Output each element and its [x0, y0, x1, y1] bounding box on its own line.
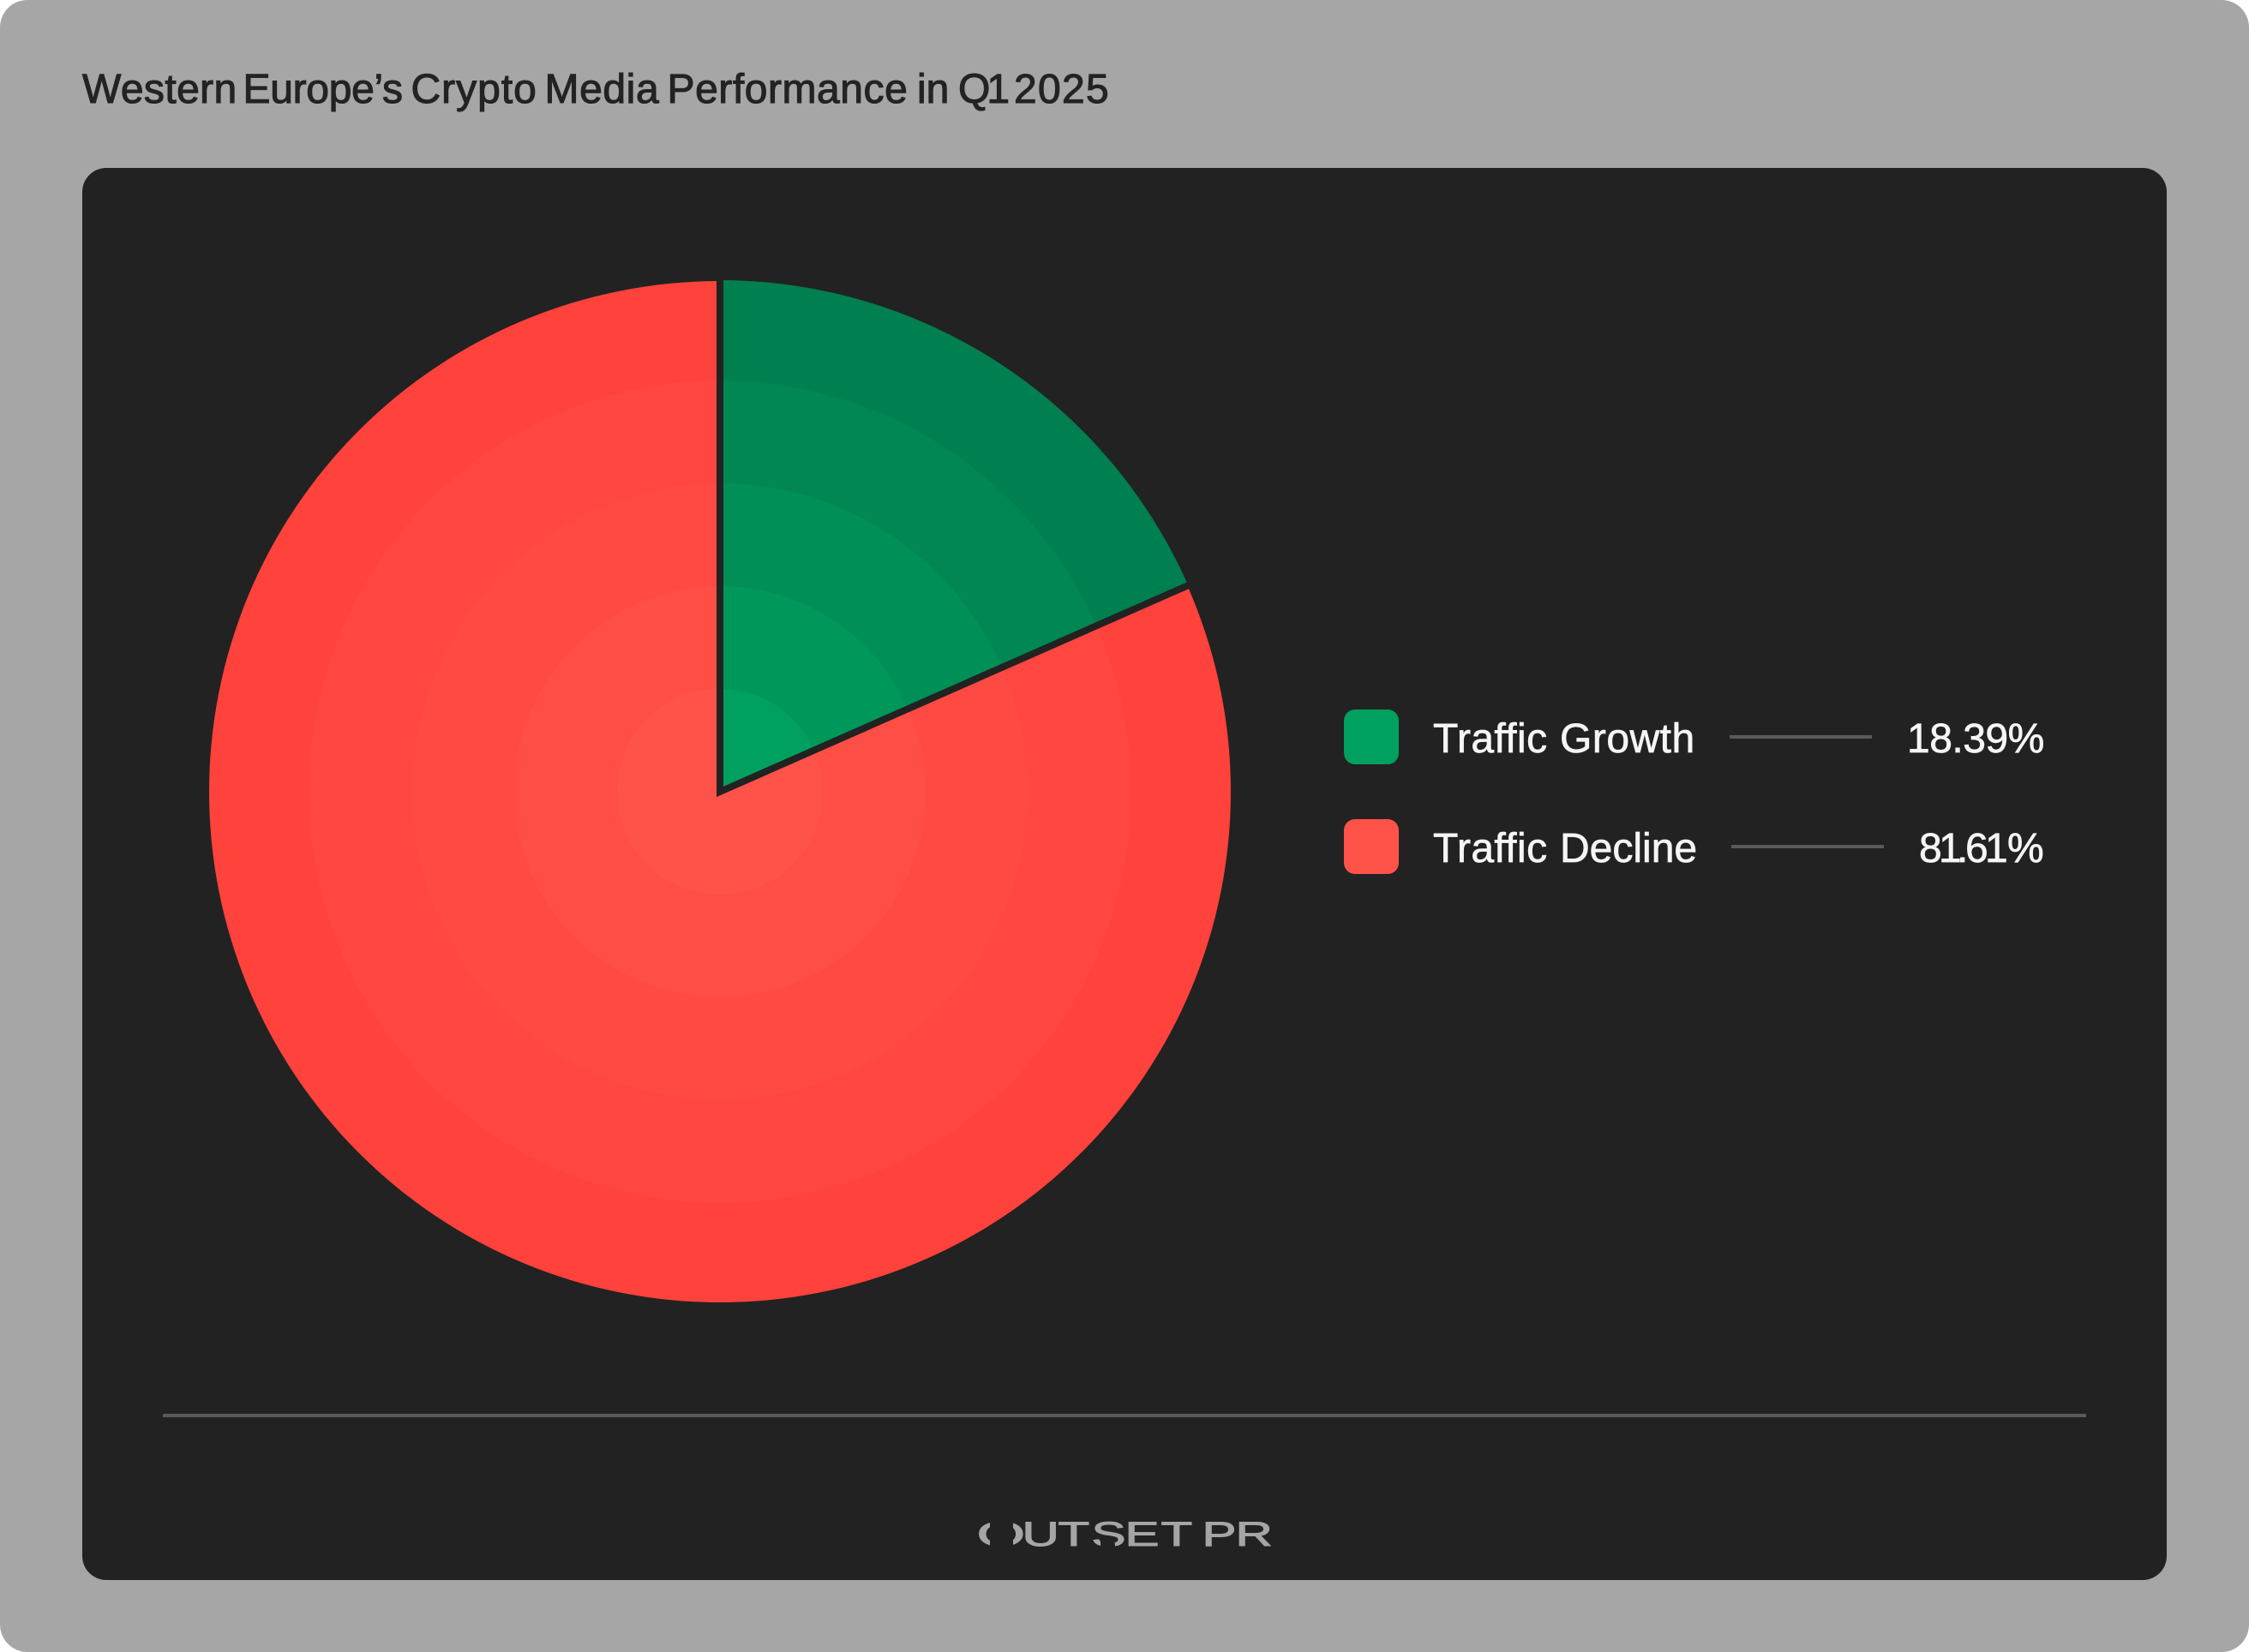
- legend row: traffic growth: [1344, 709, 2044, 764]
- pie chart: [208, 274, 1232, 1303]
- value: 18.39%: 18.39%: [1907, 716, 2044, 762]
- title: Crypto: [411, 67, 549, 112]
- swatch: green: [1344, 709, 1399, 764]
- leader line: [1730, 735, 1872, 739]
- slice separator: [720, 274, 1198, 792]
- logo cut in S: [1101, 1534, 1116, 1551]
- logo: Outset PR: UTSET PR: [1022, 1515, 1273, 1553]
- title: Media: [545, 67, 671, 112]
- swatch: red: [1344, 819, 1399, 874]
- leader line: [1731, 845, 1884, 848]
- title: 2025: [1014, 67, 1110, 112]
- label: traffic decline: Decline: [1560, 826, 1697, 871]
- label: traffic growth: Growth: [1560, 716, 1695, 762]
- slice: traffic decline 81.61%: [209, 281, 1231, 1302]
- slice: traffic growth 18.39%: [723, 280, 1186, 787]
- legend row: traffic decline: [1344, 819, 2044, 874]
- logo cut in O: [990, 1517, 1013, 1551]
- logo: Outset PR: O: [976, 1516, 1025, 1553]
- label: traffic growth: Traffic: [1433, 716, 1559, 762]
- label: traffic decline: Traffic: [1433, 826, 1559, 871]
- legend: [1344, 709, 2044, 874]
- title: Q1: [958, 67, 1014, 112]
- title: Europe’s: [243, 67, 414, 112]
- footer divider: [163, 1414, 2086, 1417]
- title: Western: [82, 67, 249, 112]
- title: in: [917, 67, 961, 112]
- value: 81.61%: 81.61%: [1919, 826, 2044, 871]
- panel: dark chart panel: [82, 168, 2167, 1580]
- title: Performance: [667, 67, 920, 112]
